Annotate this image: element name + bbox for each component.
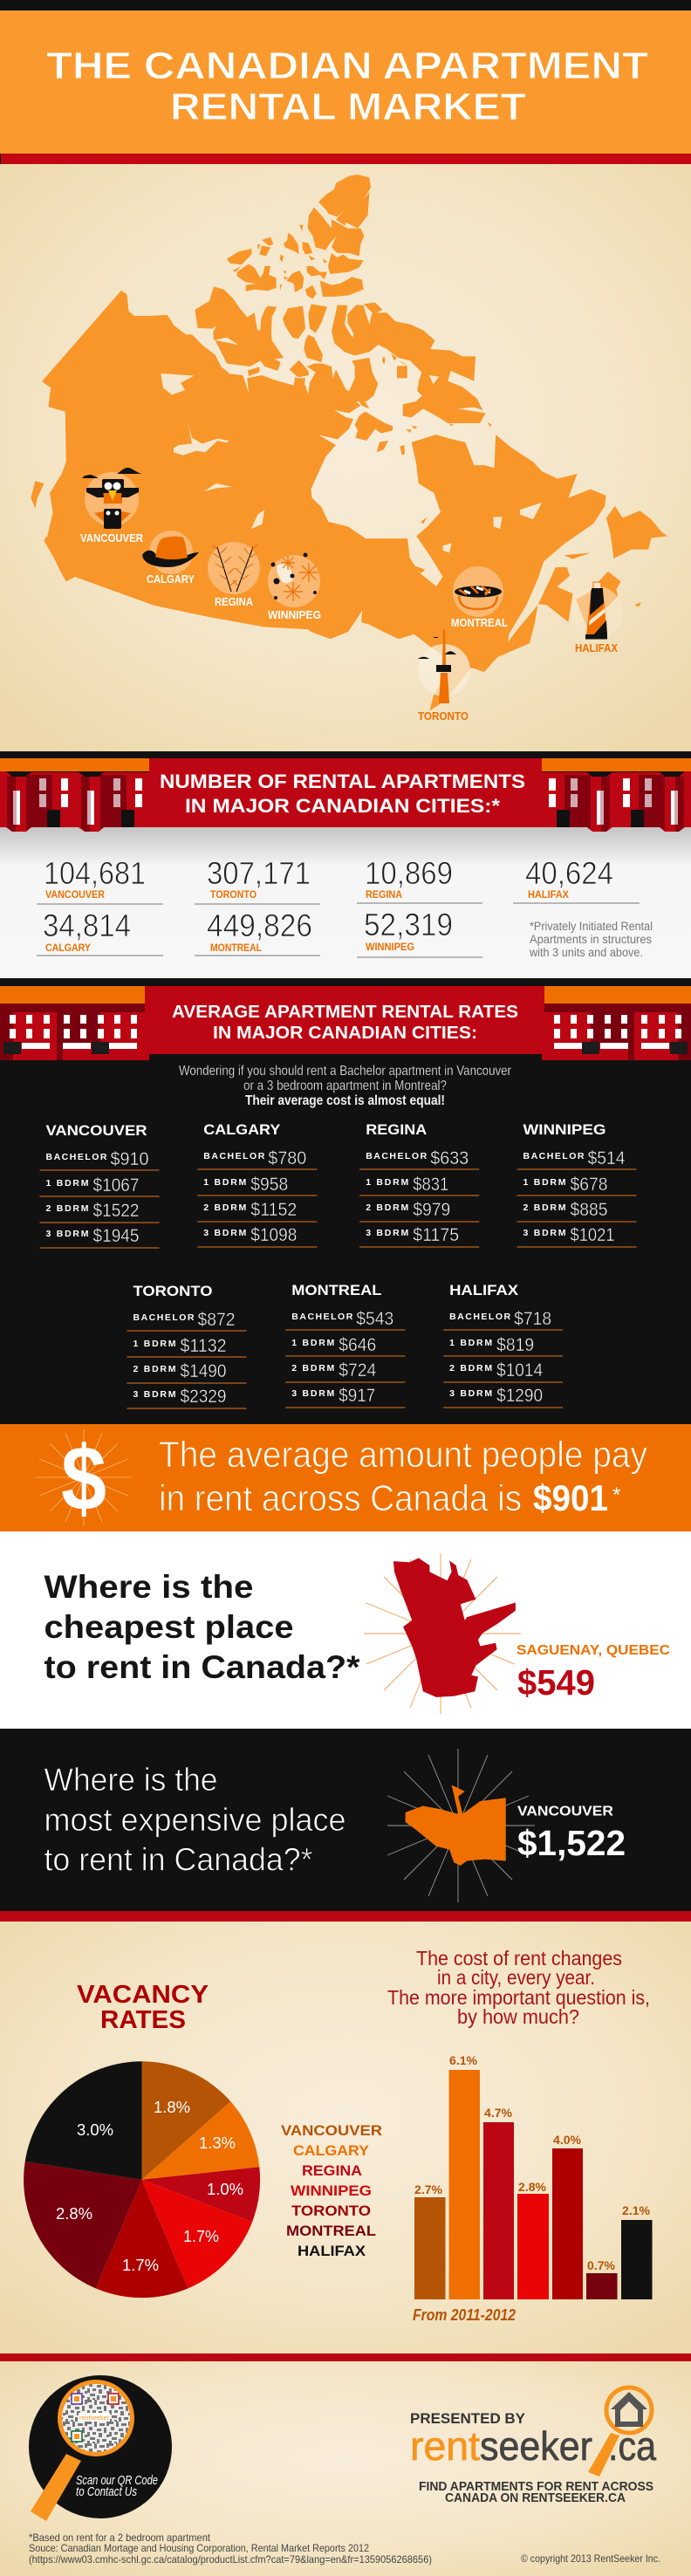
rates: Winnipeg: 2 BDRM (523, 1202, 566, 1213)
rates: Calgary: 1 BDRM (203, 1177, 247, 1188)
rates: Calgary: $958 (250, 1175, 288, 1195)
rates: Halifax: BACHELOR (449, 1312, 511, 1322)
rates: Regina: 2 BDRM (366, 1202, 408, 1213)
building strip right (542, 986, 691, 1060)
title: RENTAL MARKET (170, 86, 526, 128)
stat: Regina (357, 855, 482, 903)
stat: Montreal: 449,826 (207, 908, 312, 943)
icon: Halifax lighthouse (571, 582, 623, 639)
text: cost of rent: The cost of rent changes (416, 1947, 622, 1970)
panel: average rent banner (0, 1424, 691, 1531)
icon: Toronto CN tower (418, 629, 470, 703)
rates: Regina: 3 BDRM (366, 1228, 408, 1238)
divider bar (0, 751, 691, 759)
heading: average rental rates: AVERAGE APARTMENT RENTAL RATES (172, 1003, 518, 1022)
rates: Regina: $633 (430, 1148, 469, 1168)
bar chart: 4.0% (553, 2133, 582, 2147)
rates: Montreal (285, 1282, 405, 1408)
heading: average rental rates: IN MAJOR CANADIAN CITIES: (213, 1024, 477, 1043)
rates: Toronto: 2 BDRM (133, 1364, 176, 1374)
stat: Montreal: MONTREAL (210, 942, 262, 954)
icon: dollar sign with rays (36, 1428, 132, 1530)
label: Winnipeg: WINNIPEG (268, 609, 321, 621)
rates: Calgary: $1098 (250, 1225, 297, 1245)
map: Canada outline (31, 175, 667, 711)
question: cheapest: cheapest place (44, 1608, 293, 1645)
icon: dollar sign with rays: $ (61, 1428, 106, 1530)
stat: Toronto (195, 855, 320, 904)
panel: average rental rates (0, 978, 691, 1424)
text: average rent: * (612, 1483, 620, 1507)
stat: Winnipeg (357, 907, 482, 957)
stat: Vancouver: VANCOUVER (45, 888, 105, 901)
building strip right (542, 758, 691, 832)
presented by logo: seeker (480, 2423, 592, 2469)
presented by logo: FIND APARTMENTS FOR RENT ACROSS (419, 2479, 653, 2494)
rates: Halifax: 2 BDRM (449, 1363, 492, 1374)
stat: Winnipeg: WINNIPEG (366, 941, 414, 953)
panel: most expensive place (0, 1729, 691, 1911)
rates: Regina: $1175 (413, 1225, 459, 1245)
rates: Toronto: BACHELOR (133, 1312, 195, 1323)
intro text: or a 3 bedroom apartment in Montreal? (243, 1079, 447, 1093)
rates: Vancouver: $1945 (92, 1226, 140, 1246)
text: average rent: $901 (533, 1477, 608, 1518)
legend: REGINA (302, 2162, 362, 2179)
rates: Montreal: MONTREAL (291, 1282, 381, 1298)
label: Vancouver rent: VANCOUVER (517, 1805, 613, 1819)
rates: Winnipeg: WINNIPEG (523, 1121, 605, 1138)
rates: Vancouver: BACHELOR (45, 1152, 107, 1162)
icon: Winnipeg snow (268, 553, 320, 607)
building strip left (0, 758, 149, 832)
rates: Halifax: HALIFAX (449, 1282, 519, 1298)
footnote: privately initiated: Apartments in structures (530, 933, 652, 946)
rates: Calgary: BACHELOR (203, 1151, 265, 1161)
label: Montreal: MONTREAL (451, 617, 508, 629)
presented by logo: PRESENTED BY (410, 2410, 526, 2427)
stat: Calgary (37, 908, 163, 956)
rates: Calgary: $780 (268, 1148, 306, 1168)
sources (29, 2531, 432, 2566)
title: THE CANADIAN APARTMENT (46, 45, 648, 87)
heading: number of rental apartments (149, 758, 542, 827)
pie chart: 1.7% (183, 2228, 219, 2245)
sources: (https://www03.cmhc-schl.gc.ca/catalog/productList.cfm?cat=79&lang=en&fr=1359056268656) (29, 2553, 432, 2566)
rates: Halifax (443, 1282, 563, 1408)
icon: Vancouver totem (82, 468, 141, 529)
heading: vacancy rates: RATES (100, 2006, 186, 2034)
top black bar (0, 0, 691, 10)
rates: Vancouver: 1 BDRM (45, 1178, 89, 1189)
stat: Regina: REGINA (366, 888, 402, 901)
rates: Montreal: $646 (339, 1335, 376, 1355)
rates: Winnipeg (517, 1121, 637, 1247)
footnote: privately initiated: with 3 units and above. (529, 946, 643, 959)
stat: Calgary: 34,814 (43, 908, 131, 943)
footnote: privately initiated: *Privately Initiated Rental (530, 920, 653, 933)
icon: Vancouver map with rays (387, 1749, 535, 1902)
text: cost of rent: in a city, every year. (437, 1966, 595, 1989)
bar chart: 0.7% (587, 2258, 616, 2272)
intro text (179, 1064, 512, 1108)
pie chart: 1.8% (154, 2099, 190, 2116)
QR code magnifier: Scan our QR Code (76, 2473, 158, 2488)
label: Toronto: TORONTO (418, 710, 469, 723)
bar chart: 2.8% (518, 2180, 547, 2194)
sources: *Based on rent for a 2 bedroom apartment (29, 2531, 211, 2544)
intro text: Their average cost is almost equal! (245, 1093, 445, 1108)
intro text: Wondering if you should rent a Bachelor apartment in Vancouver (179, 1064, 512, 1079)
bar chart: 2.1% (622, 2203, 651, 2217)
bar chart: From 2011-2012 (413, 2306, 516, 2324)
red divider (0, 2353, 691, 2361)
rates: Halifax: $1014 (496, 1360, 543, 1380)
stat: Winnipeg: 52,319 (364, 907, 453, 942)
label: Vancouver rent (517, 1805, 626, 1863)
title (46, 45, 648, 128)
question: most expensive: most expensive place (44, 1801, 346, 1838)
rates: Winnipeg: $885 (571, 1200, 607, 1220)
building strip left (0, 986, 149, 1060)
text: cost of rent (387, 1947, 650, 2028)
presented by logo: CANADA ON RENTSEEKER.CA (445, 2490, 626, 2505)
panel: footer (0, 2361, 691, 2576)
label: Regina: REGINA (215, 596, 253, 608)
QR code magnifier (29, 2375, 172, 2521)
rates: Regina (359, 1121, 479, 1247)
pie chart: 1.0% (207, 2181, 243, 2198)
footnote: privately initiated (529, 920, 653, 959)
text: cost of rent: The more important question is, (387, 1986, 650, 2009)
red divider (0, 1911, 691, 1922)
rates: Halifax: $819 (496, 1335, 534, 1355)
rates: Montreal: $917 (339, 1386, 375, 1406)
panel: map of Canada (0, 164, 691, 751)
rates: Toronto: $2329 (180, 1387, 227, 1407)
heading: number of rental apartments: IN MAJOR CANADIAN CITIES:* (185, 795, 500, 817)
rates: Regina: BACHELOR (366, 1151, 428, 1161)
stat: Calgary: CALGARY (45, 942, 91, 954)
rates: Winnipeg: $678 (571, 1175, 607, 1195)
question: cheapest: Where is the (44, 1568, 253, 1605)
text: average rent: in rent across Canada is (159, 1477, 522, 1518)
label: Vancouver: VANCOUVER (80, 532, 143, 545)
rates: Toronto (127, 1283, 246, 1408)
rates: Toronto: $1132 (180, 1336, 227, 1356)
rates: Vancouver: VANCOUVER (45, 1122, 147, 1139)
label: Saguenay: $549 (517, 1662, 595, 1702)
rates: Montreal: BACHELOR (291, 1312, 353, 1322)
rates: Vancouver: $1067 (92, 1175, 140, 1196)
pie chart (24, 2061, 260, 2298)
rates: Montreal: $543 (356, 1309, 393, 1329)
rates: Halifax: 3 BDRM (449, 1388, 492, 1399)
rates: Calgary: 2 BDRM (203, 1202, 247, 1213)
rates: Vancouver: $910 (110, 1149, 148, 1169)
presented by logo (410, 2388, 656, 2505)
rates: Vancouver: 2 BDRM (45, 1203, 89, 1214)
panel: number of rental apartments (0, 758, 691, 978)
label: Calgary: CALGARY (147, 573, 195, 586)
legend: CALGARY (293, 2142, 370, 2159)
rates: Vancouver: 3 BDRM (45, 1229, 89, 1239)
rates: Calgary: CALGARY (203, 1121, 281, 1138)
bar chart: 4.7% (484, 2106, 513, 2120)
stat: Halifax (513, 855, 640, 903)
bar chart: 2.7% (414, 2182, 443, 2196)
stat: Regina: 10,869 (365, 855, 453, 891)
rates: Halifax: $718 (514, 1309, 551, 1329)
text: average rent (159, 1434, 647, 1518)
rates: Vancouver: $1522 (92, 1201, 140, 1221)
stat: Toronto: TORONTO (210, 888, 257, 901)
rates: Regina: $979 (413, 1200, 450, 1220)
legend: HALIFAX (298, 2243, 366, 2259)
stat: Vancouver (37, 855, 163, 904)
rates: Winnipeg: 3 BDRM (523, 1228, 566, 1238)
icon: Quebec map with rays (364, 1553, 521, 1714)
rates: Winnipeg: $514 (588, 1148, 626, 1168)
rates: Toronto: TORONTO (133, 1283, 213, 1299)
stat: Vancouver: 104,681 (44, 855, 146, 891)
label: Saguenay (517, 1643, 670, 1702)
QR code magnifier: rentseeker (79, 2415, 110, 2422)
label: Vancouver rent: $1,522 (517, 1823, 626, 1863)
icon: Regina wheat (208, 542, 260, 594)
label: Halifax: HALIFAX (575, 642, 619, 654)
rates: Calgary: $1152 (250, 1200, 297, 1220)
rates: Toronto: 1 BDRM (133, 1339, 176, 1349)
pie chart: 1.7% (122, 2257, 159, 2274)
rates: Montreal: 2 BDRM (291, 1363, 335, 1374)
rates: Halifax: $1290 (496, 1386, 543, 1406)
presented by logo: .ca (608, 2423, 656, 2469)
pie chart: 3.0% (77, 2121, 113, 2139)
icon: Calgary cowboy hat (142, 531, 199, 574)
heading: vacancy rates (77, 1981, 209, 2034)
rates: Halifax: 1 BDRM (449, 1338, 492, 1348)
label: Saguenay: SAGUENAY, QUEBEC (517, 1643, 670, 1658)
rates: Winnipeg: 1 BDRM (523, 1177, 566, 1188)
pie chart: 2.8% (56, 2205, 92, 2223)
rates: Montreal: 3 BDRM (291, 1388, 335, 1399)
legend (281, 2122, 382, 2259)
bar chart: 6.1% (449, 2053, 478, 2067)
rates: Winnipeg: $1021 (571, 1225, 614, 1245)
rates: Regina: REGINA (366, 1121, 427, 1138)
copyright: © copyright 2013 RentSeeker Inc. (521, 2552, 660, 2565)
stat: Halifax: HALIFAX (528, 888, 569, 901)
text: cost of rent: by how much? (457, 2005, 579, 2028)
rates: Vancouver (40, 1122, 159, 1248)
legend: WINNIPEG (291, 2182, 372, 2199)
question: most expensive: to rent in Canada?* (44, 1841, 312, 1878)
rates: Toronto: $1490 (180, 1361, 227, 1381)
legend: MONTREAL (286, 2223, 376, 2239)
legend: VANCOUVER (281, 2122, 382, 2139)
panel: vacancy rates and rent change (0, 1922, 691, 2353)
rates: Regina: $831 (413, 1175, 448, 1195)
heading: number of rental apartments: NUMBER OF RENTAL APARTMENTS (160, 771, 525, 792)
question: most expensive (44, 1761, 346, 1878)
legend: TORONTO (291, 2203, 371, 2219)
heading: average rental rates (145, 986, 544, 1054)
bar chart (413, 2053, 653, 2324)
panel: title banner (0, 10, 691, 164)
rates: Winnipeg: BACHELOR (523, 1151, 585, 1161)
rates: Toronto: $872 (197, 1310, 236, 1330)
rates: Toronto: 3 BDRM (133, 1389, 176, 1400)
stat: Toronto: 307,171 (207, 855, 311, 891)
presented by logo: rent (410, 2423, 480, 2469)
sources: Souce: Canadian Mortage and Housing Corporation, Rental Market Reports 2012 (29, 2542, 369, 2554)
question: most expensive: Where is the (44, 1761, 218, 1798)
rates: Calgary: 3 BDRM (203, 1228, 247, 1238)
rates: Regina: 1 BDRM (366, 1177, 408, 1188)
text: average rent: The average amount people pay (159, 1434, 647, 1475)
question: cheapest: to rent in Canada?* (44, 1648, 360, 1685)
rates: Montreal: 1 BDRM (291, 1338, 335, 1348)
stat: Montreal (195, 908, 320, 956)
rates: Calgary (197, 1121, 317, 1247)
QR code magnifier: to Contact Us (76, 2484, 137, 2499)
pie chart: 1.3% (199, 2134, 236, 2152)
stat: Halifax: 40,624 (525, 855, 613, 891)
rates: Montreal: $724 (339, 1360, 377, 1380)
heading: vacancy rates: VACANCY (77, 1981, 209, 2009)
question: cheapest (44, 1568, 360, 1685)
panel: cheapest place (0, 1531, 691, 1729)
icon: Montreal poutine (453, 566, 503, 617)
